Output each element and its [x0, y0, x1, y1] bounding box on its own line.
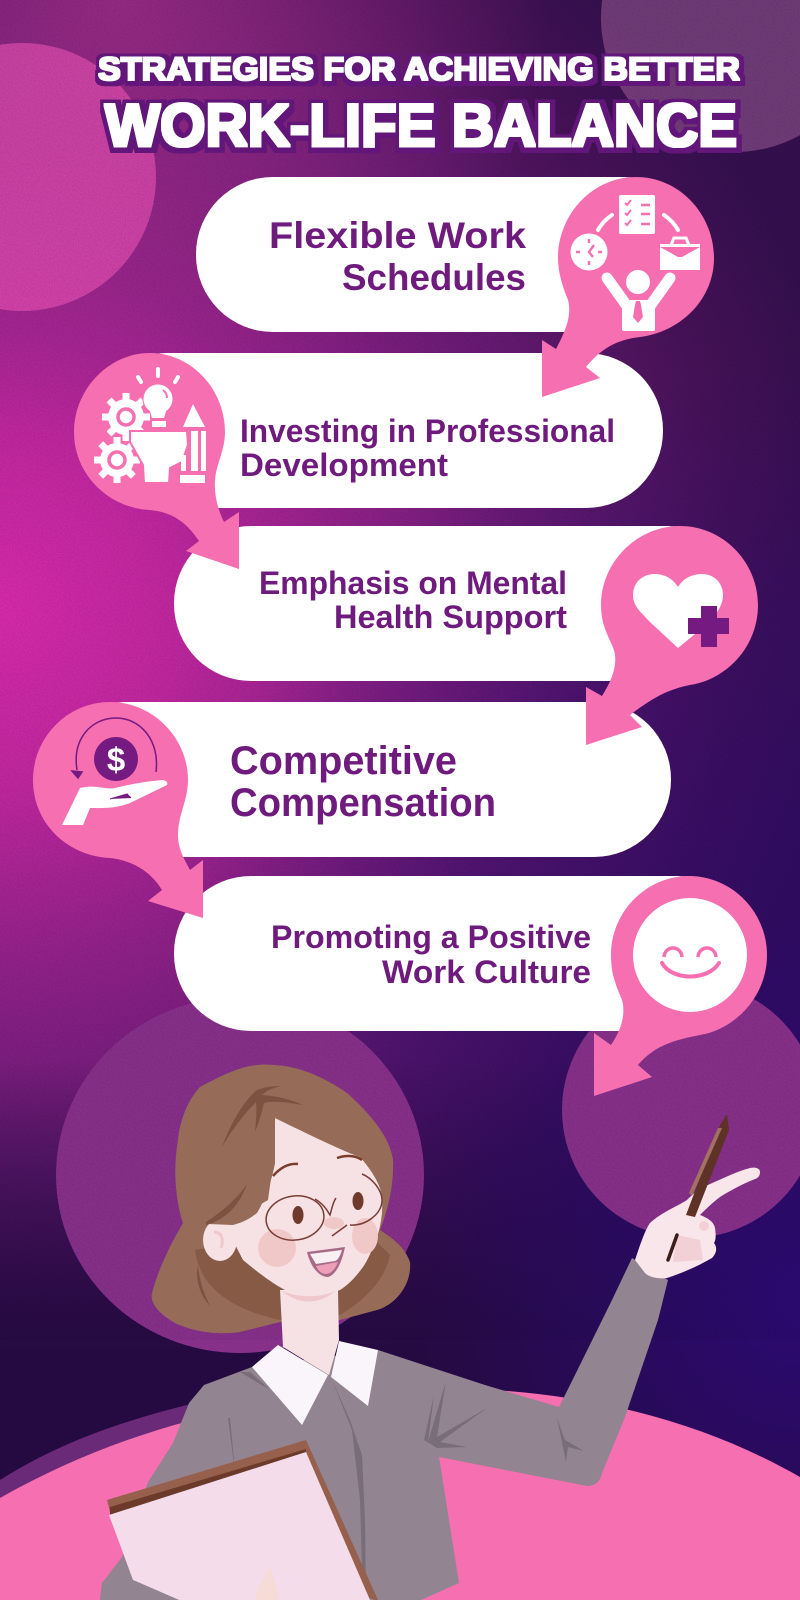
title — [98, 51, 740, 159]
icon: checklist — [619, 195, 655, 234]
text: flexible work schedules: Flexible Work — [269, 215, 526, 256]
text: promoting a positive work culture — [271, 919, 591, 990]
icon: coin: $ — [107, 741, 125, 778]
panel: pill 3 background — [174, 526, 745, 681]
hair front — [176, 1065, 393, 1225]
text: investing in professional development — [240, 413, 615, 483]
icon: pencil — [180, 404, 206, 483]
clipboard paper — [109, 1452, 370, 1600]
eyes — [292, 1192, 364, 1224]
title line 2: WORK-LIFE BALANCE — [105, 92, 737, 159]
text: promoting a positive work culture: Work Culture — [382, 954, 591, 990]
panel: pill 1 background — [196, 177, 700, 332]
icon: smiley face — [633, 898, 747, 1012]
text: promoting a positive work culture: Promoting a Positive — [271, 919, 591, 955]
text: competitive compensation: Compensation — [230, 781, 496, 825]
mouth — [307, 1247, 345, 1277]
text: investing in professional development: Investing in Professional — [240, 413, 615, 449]
lower sleeve over paper — [100, 1580, 179, 1600]
face — [225, 1118, 382, 1294]
icon: briefcase — [660, 238, 700, 270]
cheeks — [258, 1217, 378, 1267]
glasses — [263, 1174, 382, 1244]
sweater — [100, 1258, 668, 1600]
panel: pill 4 background — [48, 702, 671, 857]
icon: circular arrow — [72, 718, 157, 778]
icon: plus — [688, 606, 729, 647]
hair back — [152, 1065, 410, 1333]
bubble 5 with smile icon — [594, 876, 767, 1096]
icon: upper gear — [102, 393, 150, 441]
bubble 1 with schedule icon — [542, 177, 714, 397]
icon: head silhouette — [130, 431, 188, 483]
sweater folds — [228, 1372, 584, 1600]
text: emphasis on mental health support — [259, 565, 567, 635]
ear — [203, 1219, 237, 1261]
background circle: lower right — [562, 982, 800, 1238]
collar — [252, 1341, 378, 1425]
icon: heart — [633, 574, 723, 648]
pen — [668, 1114, 729, 1260]
background circle: top right — [601, 0, 800, 152]
icon: lower gear — [94, 437, 140, 483]
background circle: top left — [0, 43, 156, 311]
icon: clock — [570, 234, 608, 270]
icon: light rays — [138, 369, 178, 382]
text: competitive compensation: Competitive — [230, 739, 457, 783]
icon: light bulb — [143, 384, 173, 427]
background hill: pink — [0, 1388, 800, 1600]
icon: coin — [94, 737, 138, 781]
neck — [280, 1290, 339, 1375]
clipboard back — [107, 1440, 378, 1600]
text: investing in professional development: Development — [240, 447, 448, 483]
bubble 2 with development icon — [74, 353, 239, 569]
icon: hand — [62, 780, 167, 825]
bubble 3 with heart icon — [586, 526, 758, 745]
hair inner shade — [195, 1235, 390, 1320]
text: competitive compensation — [230, 739, 496, 825]
raised hand — [635, 1168, 760, 1278]
text: emphasis on mental health support: Health Support — [334, 599, 567, 635]
clipboard dark edge — [110, 1449, 306, 1516]
eyebrows — [273, 1156, 362, 1176]
background hill: shadow — [0, 1403, 260, 1530]
panel: pill 5 background — [174, 876, 755, 1031]
title line 1: STRATEGIES FOR ACHIEVING BETTER — [98, 51, 740, 87]
icon: arcs — [598, 215, 678, 230]
bubble 4 with money icon — [33, 702, 203, 918]
background circle: behind character — [56, 997, 424, 1353]
chin shadow — [282, 1291, 335, 1302]
hair strands — [197, 1086, 303, 1306]
panel: pill 2 background — [90, 353, 663, 508]
holding thumb — [255, 1568, 280, 1600]
text: flexible work schedules — [269, 215, 526, 298]
text: emphasis on mental health support: Emphasis on Mental — [259, 565, 567, 601]
icon: person with raised arms — [607, 270, 670, 331]
character: woman presenting — [100, 1065, 760, 1600]
text: flexible work schedules: Schedules — [342, 257, 526, 298]
